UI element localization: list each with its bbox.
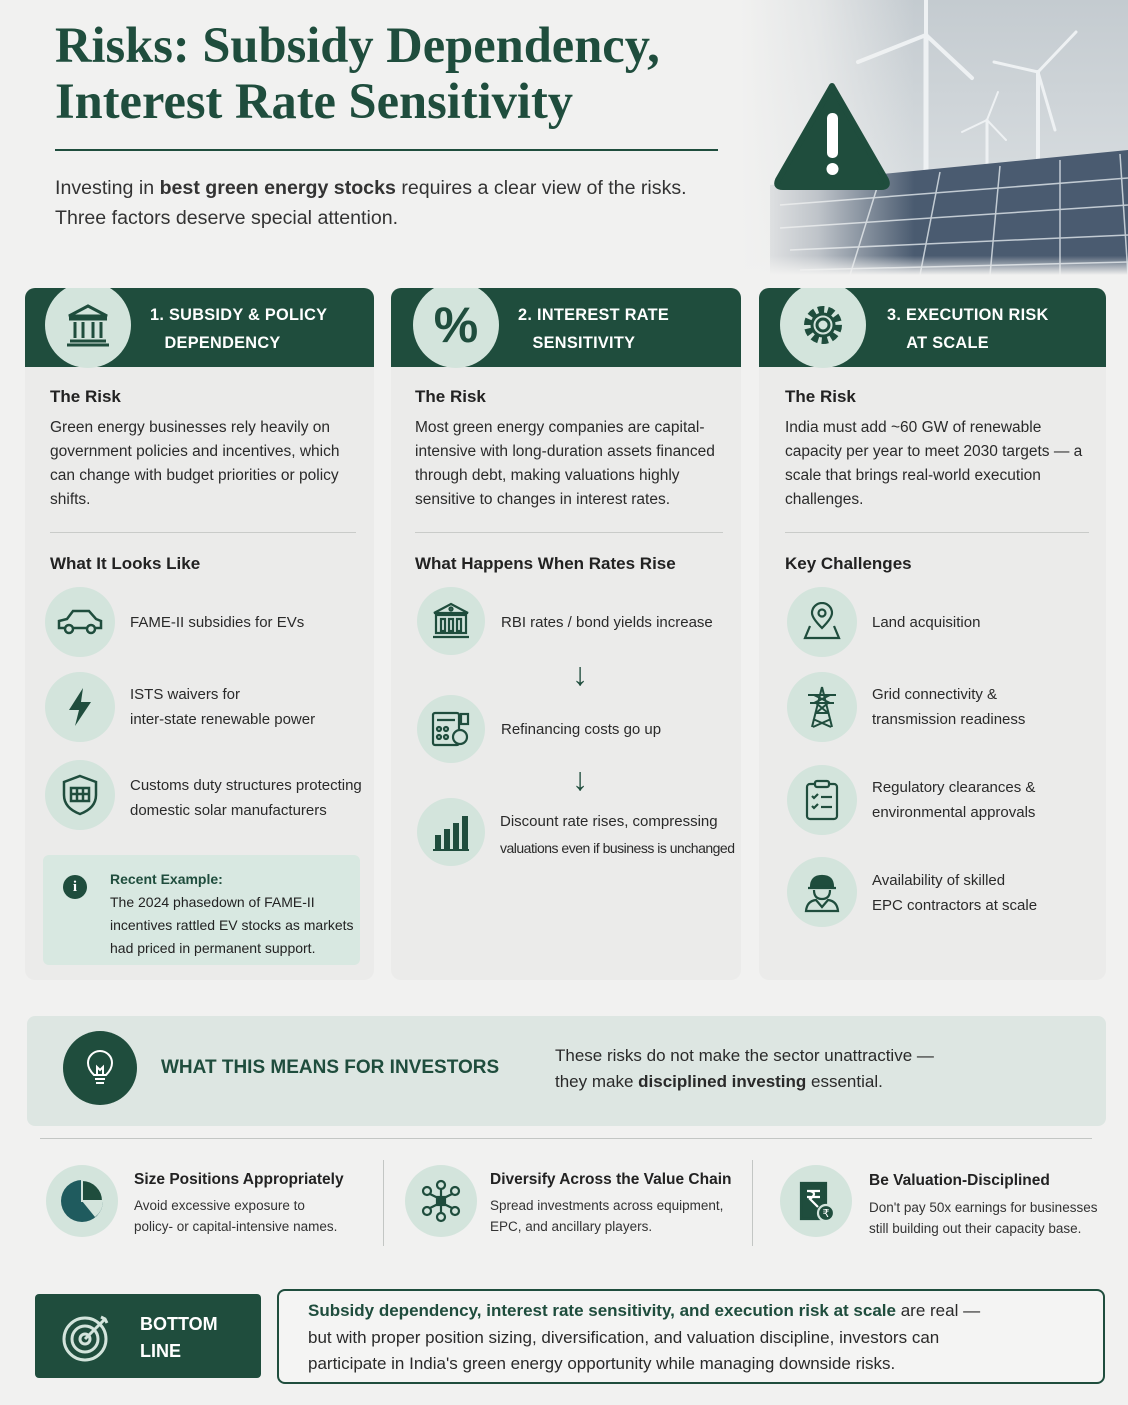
panel: execution risk at scale: scale that brings real-world execution (785, 467, 1041, 484)
callout: recent example: had priced in permanent support. (110, 940, 315, 956)
banner: what this means for investors (27, 1016, 1106, 1126)
banner: what this means for investors: WHAT THIS MEANS FOR INVESTORS (161, 1057, 499, 1078)
panel: execution risk at scale: challenges. (785, 491, 863, 508)
panel: execution risk at scale: Regulatory clearances & (872, 779, 1035, 796)
panel: subsidy & policy dependency: FAME-II subsidies for EVs (130, 614, 304, 631)
tip: size positions: Size Positions Appropriately (134, 1171, 344, 1188)
icon: percent: % (434, 297, 478, 353)
tip: size positions: policy- or capital-intensive names. (134, 1219, 337, 1234)
panel: subsidy & policy dependency: What It Looks Like (50, 554, 200, 573)
bottom line label: BOTTOM (140, 1314, 218, 1334)
panel: interest rate sensitivity: valuations even if business is unchanged (500, 840, 735, 856)
item: customs duty (45, 760, 115, 830)
callout: recent example: Recent Example: (110, 871, 223, 887)
tip: valuation-disciplined: Be Valuation-Disciplined (869, 1172, 1050, 1189)
banner: what this means for investors: These risks do not make the sector unattractive — (555, 1046, 934, 1065)
icon: gear (780, 282, 866, 368)
panel: subsidy & policy dependency: ISTS waivers for (130, 686, 240, 703)
bottom line label: LINE (140, 1341, 181, 1361)
panel: subsidy & policy dependency: The Risk (50, 387, 121, 406)
callout: recent example: incentives rattled EV stocks as markets (110, 917, 354, 933)
icon: warning triangle (777, 86, 887, 187)
banner: what this means for investors: they make disciplined investing essential. (555, 1072, 883, 1091)
bottom line text: participate in India's green energy opportunity while managing downside risks. (308, 1354, 895, 1373)
panel: interest rate sensitivity: sensitive to changes in interest rates. (415, 491, 670, 508)
item: skilled EPC contractors (787, 857, 857, 927)
panel: interest rate sensitivity: Most green energy companies are capital- (415, 419, 704, 436)
title (55, 17, 660, 129)
panel: interest rate sensitivity: Refinancing costs go up (501, 721, 661, 738)
icon: lightbulb (63, 1031, 137, 1105)
panel: execution risk at scale: Grid connectivity & (872, 686, 997, 703)
panel: subsidy & policy dependency: DEPENDENCY (164, 334, 281, 352)
tip: diversify: Spread investments across equipment, (490, 1198, 723, 1213)
panel: interest rate sensitivity: through debt, making valuations highly (415, 467, 680, 484)
icon: target (62, 1316, 108, 1362)
panel: interest rate sensitivity: Discount rate rises, compressing (500, 813, 718, 830)
arrow down: ↓ (572, 656, 588, 692)
panel: execution risk at scale: The Risk (785, 387, 856, 406)
panel: interest rate sensitivity (391, 288, 741, 980)
panel: execution risk at scale: capacity per year to meet 2030 targets — a (785, 443, 1082, 460)
arrow down: ↓ (572, 761, 588, 797)
step: refinancing (417, 695, 485, 763)
panel: interest rate sensitivity: intensive with long-duration assets financed (415, 443, 715, 460)
intro text: Three factors deserve special attention. (55, 207, 398, 229)
tip: valuation-disciplined (780, 1165, 1097, 1237)
bottom line text: Subsidy dependency, interest rate sensitivity, and execution risk at scale are real — (308, 1301, 980, 1320)
intro text (55, 177, 687, 229)
tip: diversify (405, 1165, 732, 1237)
icon: government building (45, 282, 131, 368)
panel: execution risk at scale: Key Challenges (785, 554, 912, 573)
panel: subsidy & policy dependency: shifts. (50, 491, 90, 508)
item: FAME-II (45, 587, 115, 657)
panel: execution risk at scale: EPC contractors at scale (872, 897, 1037, 914)
tip: valuation-disciplined: ₹ (822, 1208, 830, 1220)
item: regulatory clearances (787, 765, 857, 835)
panel: subsidy & policy dependency: Green energy businesses rely heavily on (50, 419, 330, 436)
bottom line text (277, 1289, 1105, 1384)
panel: execution risk at scale: Land acquisition (872, 614, 980, 631)
panel: interest rate sensitivity: SENSITIVITY (532, 334, 635, 352)
panel: subsidy & policy dependency: 1. SUBSIDY & POLICY (150, 306, 327, 324)
item: grid connectivity (787, 672, 857, 742)
panel: interest rate sensitivity: 2. INTEREST RATE (518, 306, 669, 324)
icon: percent (413, 282, 499, 368)
step: RBI rates (417, 587, 485, 655)
panel: subsidy & policy dependency: inter-state renewable power (130, 711, 315, 728)
panel: execution risk at scale: transmission readiness (872, 711, 1025, 728)
tip: diversify: Diversify Across the Value Chain (490, 1171, 732, 1188)
panel: subsidy & policy dependency: domestic solar manufacturers (130, 802, 327, 819)
item: land acquisition (787, 587, 857, 657)
bottom line text: but with proper position sizing, diversification, and valuation discipline, investors can (308, 1328, 939, 1346)
hero image: wind turbines and solar panels (770, 0, 1128, 274)
panel: execution risk at scale: India must add ~60 GW of renewable (785, 419, 1041, 436)
intro text: Investing in best green energy stocks requires a clear view of the risks. (55, 177, 687, 199)
bottom line label (35, 1294, 261, 1378)
step: discount rate (417, 798, 485, 866)
tip: diversify: EPC, and ancillary players. (490, 1219, 652, 1234)
panel: execution risk at scale: environmental approvals (872, 804, 1035, 821)
title: Risks: Subsidy Dependency, (55, 17, 660, 73)
panel: subsidy & policy dependency: government policies and incentives, which (50, 443, 340, 460)
tip: valuation-disciplined: still building out their capacity base. (869, 1221, 1081, 1236)
panel: subsidy & policy dependency: can change with budget priorities or policy (50, 467, 339, 484)
callout: recent example: i (73, 879, 77, 895)
panel: subsidy & policy dependency: Customs duty structures protecting (130, 777, 362, 794)
panel: execution risk at scale: AT SCALE (906, 334, 989, 352)
tip: valuation-disciplined: Don't pay 50x earnings for businesses (869, 1200, 1097, 1215)
panel: interest rate sensitivity: The Risk (415, 387, 486, 406)
panel: execution risk at scale: Availability of skilled (872, 872, 1005, 889)
panel: execution risk at scale: 3. EXECUTION RISK (887, 306, 1049, 324)
panel: interest rate sensitivity: What Happens When Rates Rise (415, 554, 676, 573)
callout: recent example (43, 855, 360, 965)
tip: size positions: Avoid excessive exposure to (134, 1198, 305, 1213)
title: Interest Rate Sensitivity (55, 73, 573, 129)
tip: size positions (46, 1165, 344, 1237)
panel: execution risk at scale (759, 288, 1106, 980)
panel: subsidy & policy dependency (25, 288, 374, 980)
callout: recent example: The 2024 phasedown of FAME-II (110, 894, 315, 910)
panel: interest rate sensitivity: RBI rates / bond yields increase (501, 614, 713, 631)
item: ISTS waivers (45, 672, 115, 742)
